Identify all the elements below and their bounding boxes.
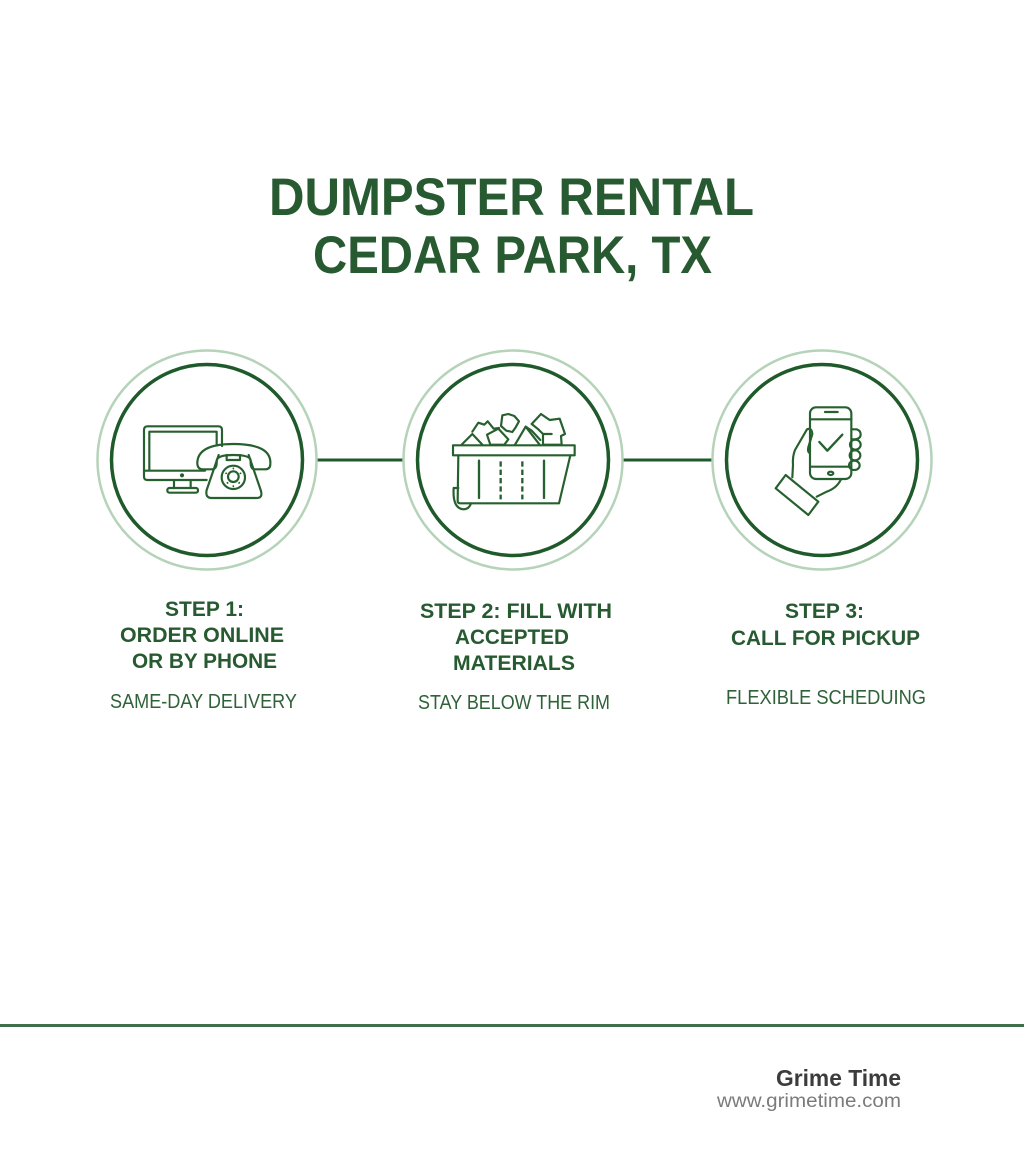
step 1 heading (120, 598, 284, 673)
step 1 heading: STEP 1: (165, 598, 244, 621)
step 1 circle (98, 350, 316, 570)
step 1 note: SAME-DAY DELIVERY (110, 691, 297, 713)
step 2 note: STAY BELOW THE RIM (418, 692, 610, 714)
step 3 note: FLEXIBLE SCHEDUING (726, 687, 926, 709)
connector: step 2 to step 3 (623, 458, 712, 462)
step 3 heading: CALL FOR PICKUP (731, 627, 920, 650)
step 3 heading: STEP 3: (785, 600, 864, 623)
footer brand: www.grimetime.com (716, 1091, 901, 1112)
icon: computer and telephone (144, 426, 270, 498)
step 1 heading: OR BY PHONE (132, 650, 277, 673)
icon: hand holding smartphone (776, 407, 861, 515)
title: DUMPSTER RENTAL (269, 168, 754, 227)
footer divider (0, 1024, 1024, 1027)
step 2 circle (404, 350, 622, 570)
step 2 heading: STEP 2: FILL WITH (420, 600, 612, 623)
step 2 heading: MATERIALS (453, 652, 575, 675)
icon: dumpster with debris (453, 414, 575, 509)
step 2 heading (420, 600, 612, 675)
step 2 heading: ACCEPTED (455, 626, 569, 649)
step 1 heading: ORDER ONLINE (120, 624, 284, 647)
title (269, 168, 754, 285)
step 3 circle (712, 350, 932, 570)
footer brand (716, 1065, 901, 1112)
footer brand: Grime Time (776, 1065, 901, 1091)
step 3 heading (731, 600, 920, 650)
connector: step 1 to step 2 (317, 458, 404, 462)
title: CEDAR PARK, TX (313, 226, 712, 285)
